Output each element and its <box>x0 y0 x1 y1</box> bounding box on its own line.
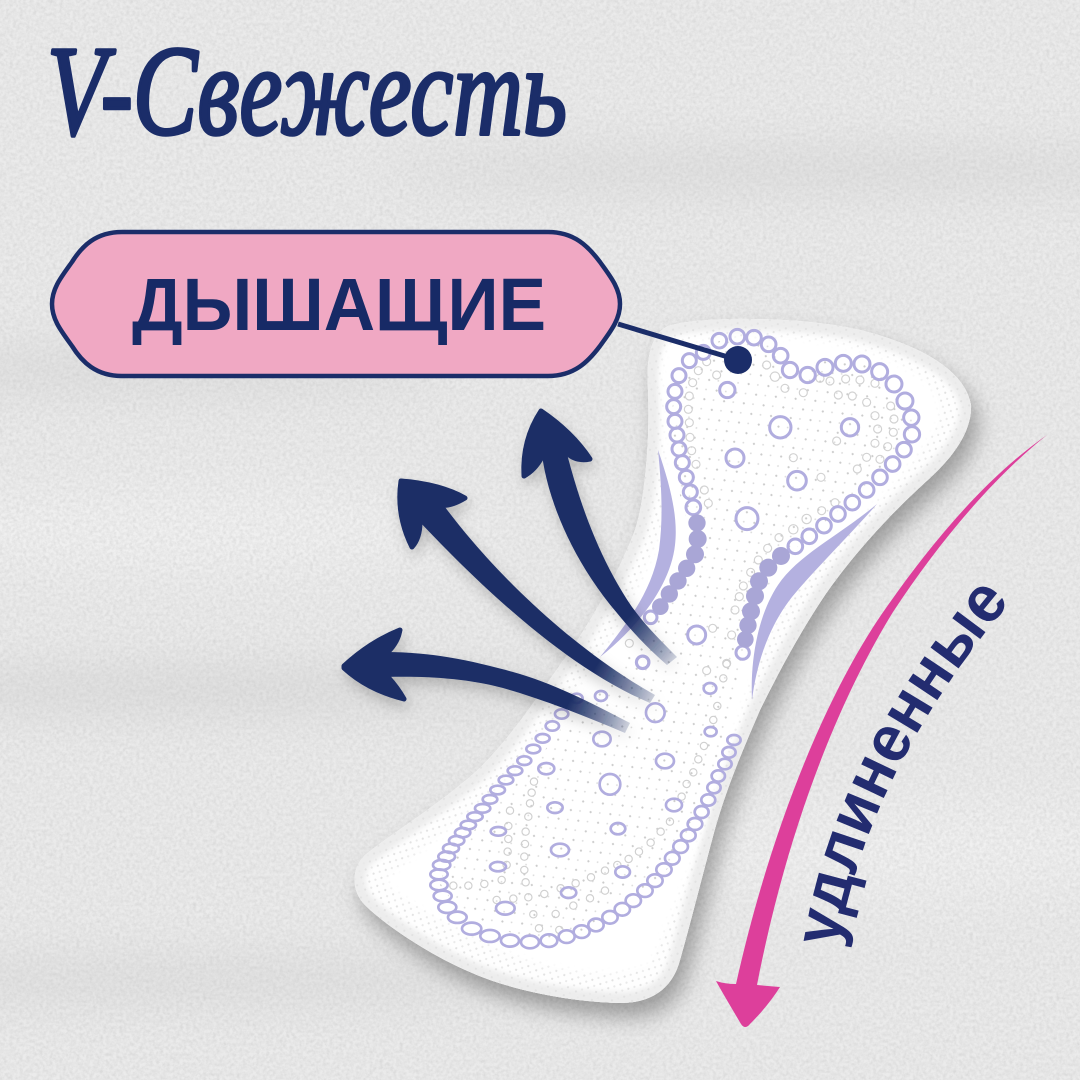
badge text: ДЫШАЩИЕ <box>132 263 546 346</box>
pill badge <box>52 232 620 376</box>
lower small embossed rings <box>450 660 730 934</box>
arrow: top air flow <box>524 411 677 665</box>
title: V-Свежесть <box>47 20 567 162</box>
filled beads in the narrow middle <box>652 514 790 648</box>
panel liner: breathable pad illustration <box>340 310 980 1010</box>
lower outline beads <box>430 656 741 948</box>
pad body <box>354 319 971 1003</box>
side label: elongated: удлиненные <box>804 586 1004 948</box>
arrow: middle air flow <box>400 481 655 703</box>
arrow: elongated length <box>716 435 1047 1027</box>
callout: breathable label with leader <box>52 232 752 376</box>
upper small embossed rings <box>625 358 898 675</box>
left side channel swoosh <box>600 450 676 657</box>
arrow: lower air flow <box>344 630 630 733</box>
leader dot <box>724 346 752 374</box>
leader line <box>618 324 738 360</box>
upper outline beads <box>636 329 920 669</box>
right side channel swoosh <box>752 504 877 700</box>
